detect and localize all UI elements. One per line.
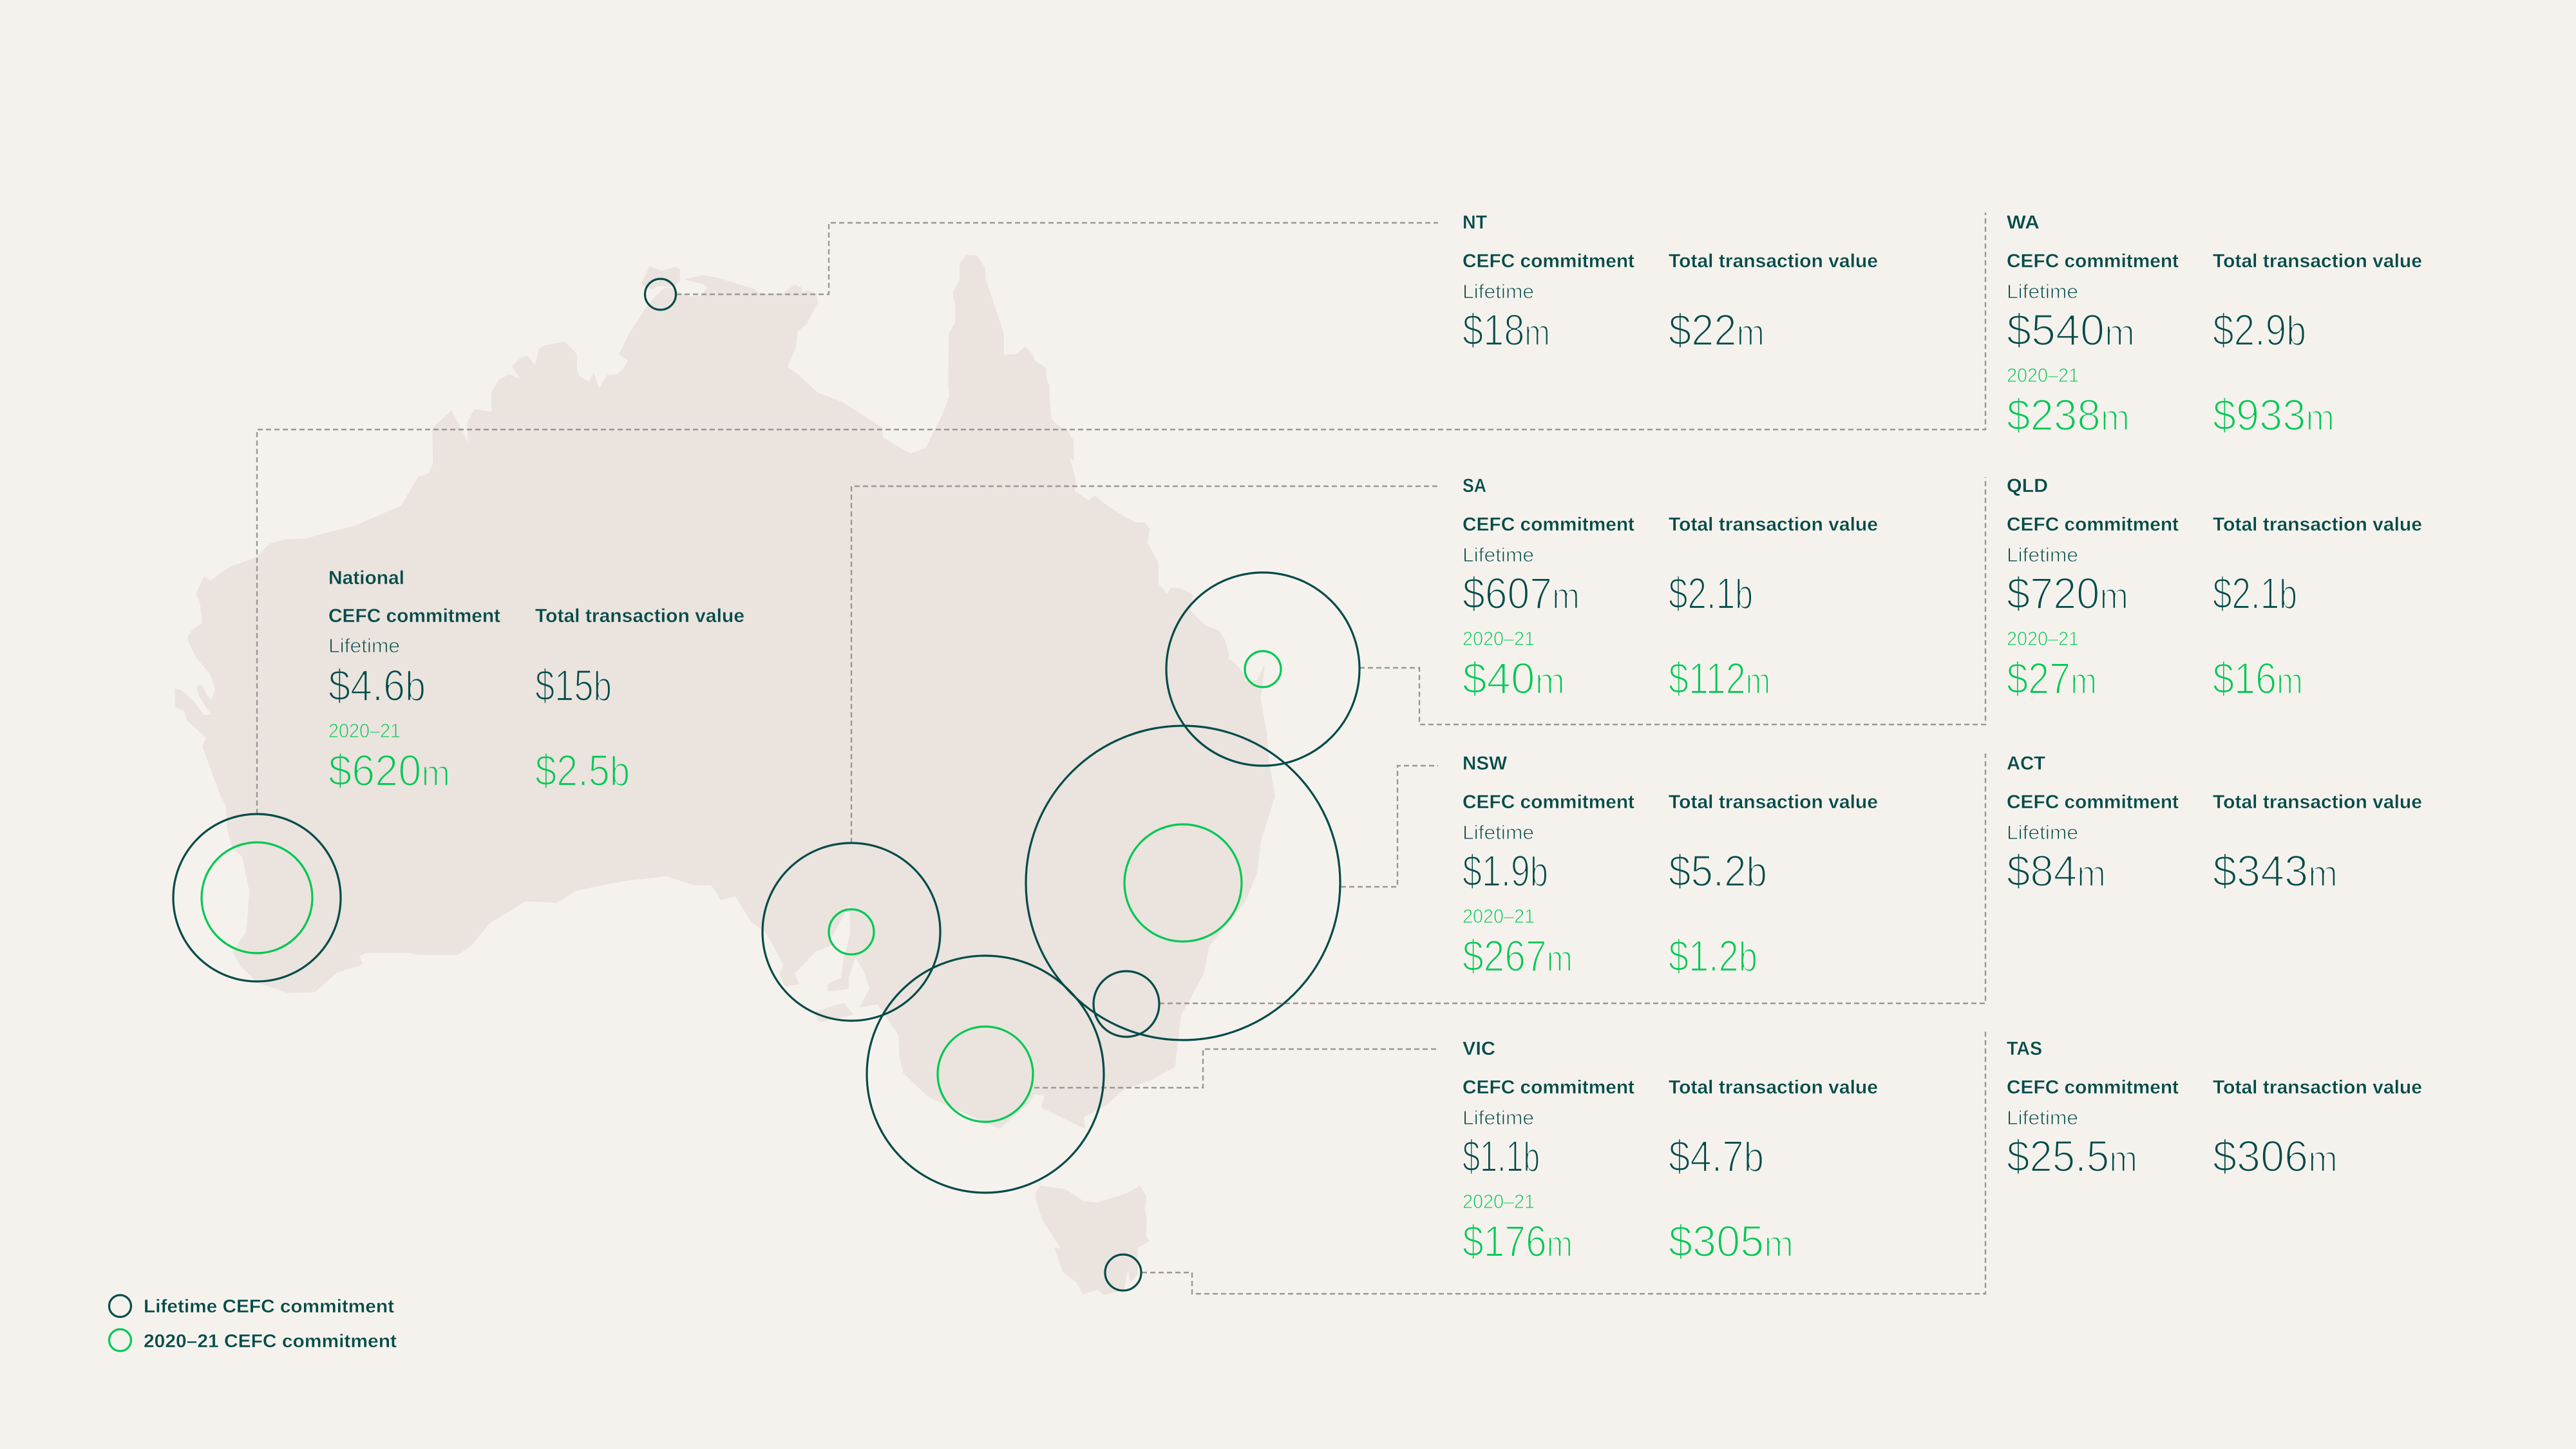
panel: VIC: $1.1b bbox=[1463, 1132, 1540, 1181]
bubbles: SA bbox=[762, 843, 940, 1021]
connector: SA bbox=[851, 486, 1438, 843]
panel: TAS bbox=[2007, 1038, 2422, 1181]
panel: National: 2020–21 bbox=[328, 719, 401, 742]
panel: SA: $40m bbox=[1463, 654, 1565, 703]
panel: ACT bbox=[2007, 753, 2422, 896]
panel: WA: $933m bbox=[2213, 390, 2334, 440]
panel: WA: CEFC commitment bbox=[2007, 251, 2179, 272]
panel: TAS: CEFC commitment bbox=[2007, 1077, 2179, 1098]
legend: lifetime marker bbox=[109, 1295, 131, 1317]
panel: SA: $607m bbox=[1463, 569, 1580, 618]
panel: ACT: $84m bbox=[2007, 846, 2106, 896]
panel: WA: 2020–21 bbox=[2007, 364, 2079, 386]
panel: VIC: $4.7b bbox=[1669, 1132, 1764, 1181]
panel: NSW: 2020–21 bbox=[1463, 905, 1535, 927]
connector: NSW bbox=[1341, 766, 1438, 887]
map: Kangaroo Island bbox=[815, 1003, 853, 1021]
panel: NSW: CEFC commitment bbox=[1463, 791, 1634, 813]
panel: National bbox=[328, 567, 744, 795]
panel: SA: 2020–21 bbox=[1463, 627, 1535, 650]
panel: WA: $238m bbox=[2007, 390, 2130, 440]
bubbles: National bbox=[173, 814, 341, 981]
panel: NSW: $267m bbox=[1463, 931, 1573, 981]
legend: 2020-21 marker bbox=[109, 1329, 131, 1351]
heading: ACT: ACT bbox=[2007, 753, 2045, 774]
panel: NT: $22m bbox=[1669, 305, 1765, 355]
connector: ACT bbox=[1159, 753, 1985, 1003]
legend: 2020–21 CEFC commitment bbox=[144, 1331, 397, 1352]
panel: SA bbox=[1463, 475, 1878, 703]
panel: NT bbox=[1463, 212, 1878, 355]
panel: ACT: CEFC commitment bbox=[2007, 791, 2179, 813]
panel: TAS: Lifetime bbox=[2007, 1106, 2078, 1129]
bubbles: NT bbox=[645, 279, 676, 310]
map: Australia silhouette bbox=[175, 256, 1274, 1294]
panel: SA: $2.1b bbox=[1669, 569, 1753, 618]
panel: NSW: $1.2b bbox=[1669, 931, 1757, 981]
bubbles: QLD bbox=[1166, 573, 1359, 766]
panel: QLD: 2020–21 bbox=[2007, 627, 2079, 650]
panel: VIC: Lifetime bbox=[1463, 1106, 1534, 1129]
panel: VIC: $176m bbox=[1463, 1217, 1573, 1266]
map: Tasmania bbox=[1036, 1186, 1149, 1294]
panel: QLD: $2.1b bbox=[2213, 569, 2297, 618]
panel: NT: Lifetime bbox=[1463, 280, 1534, 303]
panel: NT: Total transaction value bbox=[1669, 251, 1878, 272]
panel: WA: Lifetime bbox=[2007, 280, 2078, 303]
panel: VIC: CEFC commitment bbox=[1463, 1077, 1634, 1098]
legend bbox=[109, 1295, 397, 1352]
panel: QLD: $720m bbox=[2007, 569, 2128, 618]
connector: National bbox=[257, 213, 1985, 814]
panel: QLD: $16m bbox=[2213, 654, 2303, 703]
panel: National: CEFC commitment bbox=[328, 605, 500, 627]
heading: National: National bbox=[328, 567, 404, 589]
connector: NT bbox=[676, 223, 1438, 294]
panel: National: $15b bbox=[535, 661, 612, 710]
panel: SA: CEFC commitment bbox=[1463, 514, 1634, 535]
heading: SA: SA bbox=[1463, 475, 1486, 497]
panel: WA: $540m bbox=[2007, 305, 2135, 355]
panel: SA: Total transaction value bbox=[1669, 514, 1878, 535]
panel: National: $620m bbox=[328, 746, 450, 795]
panel: VIC bbox=[1463, 1038, 1878, 1266]
panel: TAS: Total transaction value bbox=[2213, 1077, 2422, 1098]
panel: VIC: 2020–21 bbox=[1463, 1190, 1535, 1213]
panel: NT: CEFC commitment bbox=[1463, 251, 1634, 272]
map: Melville Island bbox=[641, 267, 679, 289]
heading: WA: WA bbox=[2007, 212, 2040, 233]
panel: QLD: CEFC commitment bbox=[2007, 514, 2179, 535]
panel: National: Total transaction value bbox=[535, 605, 744, 627]
panel: WA: Total transaction value bbox=[2213, 251, 2422, 272]
panel: TAS: $25.5m bbox=[2007, 1132, 2137, 1181]
bubbles: VIC bbox=[867, 956, 1104, 1193]
panel: ACT: Total transaction value bbox=[2213, 791, 2422, 813]
map: mainland bbox=[175, 256, 1274, 1128]
heading: VIC: VIC bbox=[1463, 1038, 1495, 1059]
connector: QLD bbox=[1359, 477, 1985, 724]
panel: VIC: Total transaction value bbox=[1669, 1077, 1878, 1098]
panel: WA: $2.9b bbox=[2213, 305, 2306, 355]
panel: NSW: $1.9b bbox=[1463, 846, 1548, 896]
panel: ACT: Lifetime bbox=[2007, 821, 2078, 844]
panel: NSW: Total transaction value bbox=[1669, 791, 1878, 813]
panel: NT: $18m bbox=[1463, 305, 1550, 355]
panel: National: $2.5b bbox=[535, 746, 630, 795]
heading: QLD: QLD bbox=[2007, 475, 2048, 497]
panel: TAS: $306m bbox=[2213, 1132, 2338, 1181]
bubbles: TAS bbox=[1105, 1255, 1141, 1291]
panel: NSW: $5.2b bbox=[1669, 846, 1767, 896]
panel: VIC: $305m bbox=[1669, 1217, 1794, 1266]
bubbles: ACT bbox=[1094, 971, 1159, 1037]
panel: ACT: $343m bbox=[2213, 846, 2338, 896]
connector: TAS bbox=[1142, 1032, 1985, 1294]
panel: SA: Lifetime bbox=[1463, 544, 1534, 566]
bubbles: NSW bbox=[1026, 726, 1340, 1040]
legend: Lifetime CEFC commitment bbox=[144, 1296, 394, 1317]
heading: TAS: TAS bbox=[2007, 1038, 2042, 1059]
connector: VIC bbox=[1034, 1049, 1438, 1088]
panel: National: $4.6b bbox=[328, 661, 426, 710]
panel: QLD bbox=[2007, 475, 2422, 703]
heading: NSW: NSW bbox=[1463, 753, 1508, 774]
panel: WA bbox=[2007, 212, 2422, 440]
panel: QLD: $27m bbox=[2007, 654, 2097, 703]
panel: QLD: Total transaction value bbox=[2213, 514, 2422, 535]
heading: NT: NT bbox=[1463, 212, 1487, 233]
panel: National: Lifetime bbox=[328, 634, 400, 657]
panel: NSW bbox=[1463, 753, 1878, 981]
panel: NSW: Lifetime bbox=[1463, 821, 1534, 844]
panel: SA: $112m bbox=[1669, 654, 1770, 703]
panel: QLD: Lifetime bbox=[2007, 544, 2078, 566]
